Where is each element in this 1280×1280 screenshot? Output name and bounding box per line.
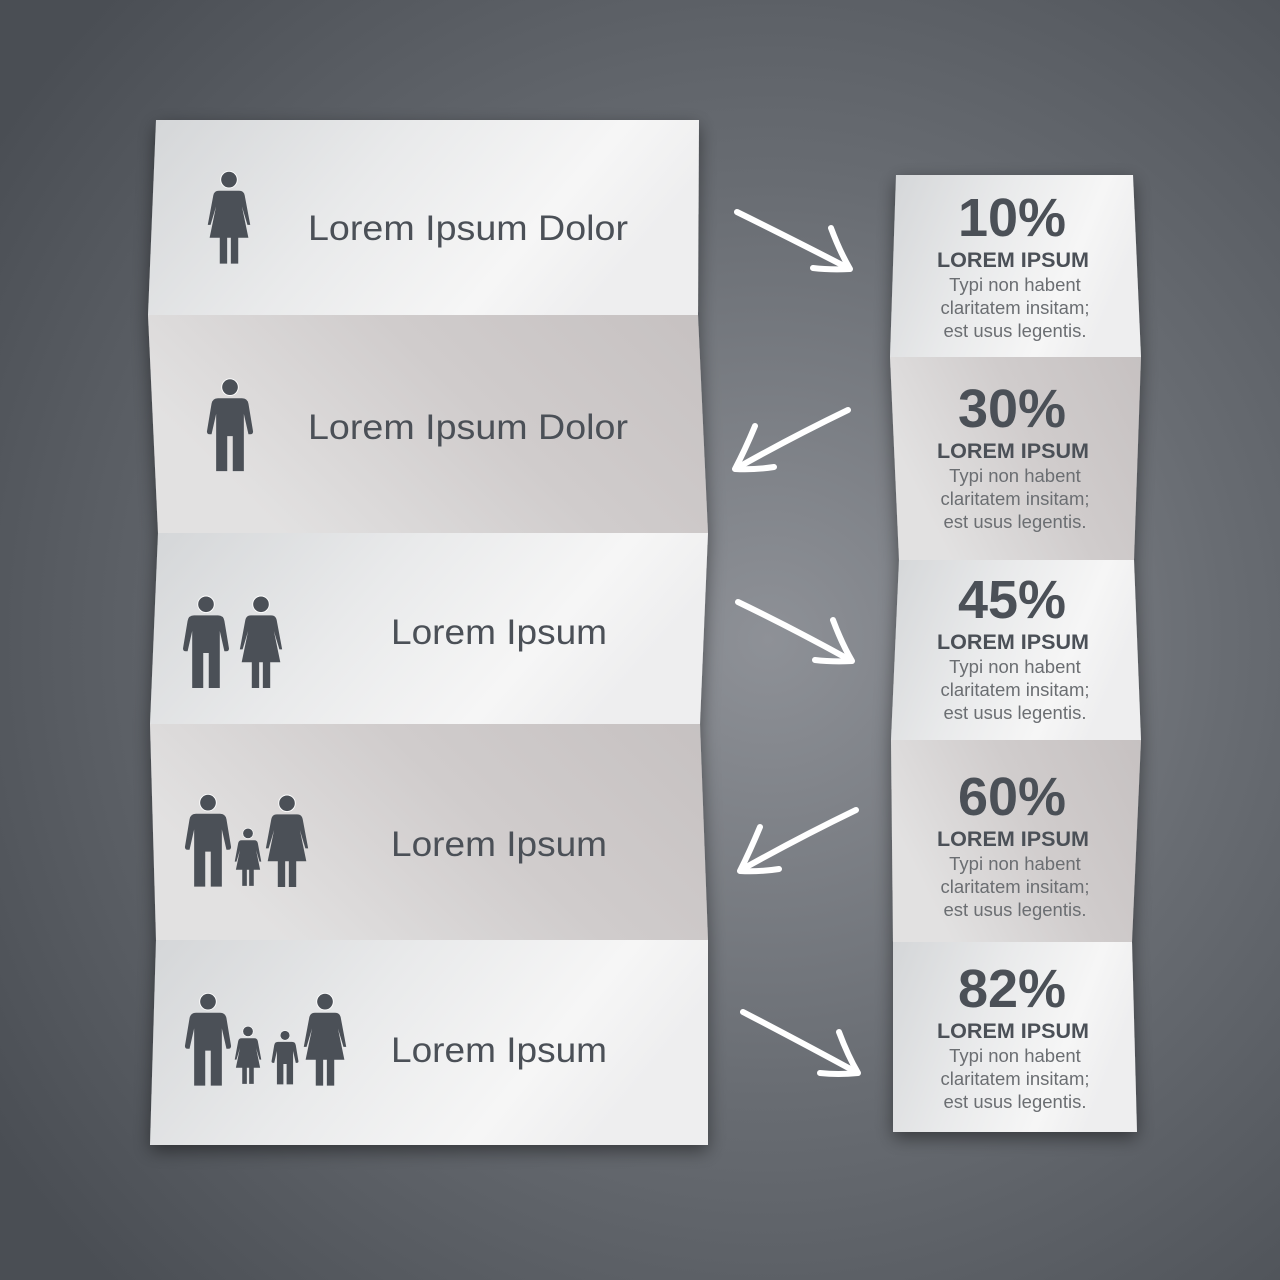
stat: 60%: LOREM IPSUM xyxy=(937,828,1089,851)
stat: 82%: claritatem insitam; xyxy=(940,1068,1090,1089)
row 1: woman icon and label xyxy=(208,171,628,264)
stat: 10%: Typi non habent xyxy=(949,274,1081,295)
arrow 1 xyxy=(737,212,850,269)
stat: 82%: LOREM IPSUM xyxy=(937,1020,1089,1043)
stat: 10%: LOREM IPSUM xyxy=(937,249,1089,272)
stat: 30% xyxy=(937,379,1090,532)
stat: 60%: est usus legentis. xyxy=(944,899,1086,920)
stat: 82%: Typi non habent xyxy=(949,1045,1081,1066)
stat: 10% xyxy=(937,188,1090,341)
stat: 60%: Typi non habent xyxy=(949,853,1081,874)
stat: 30%: 30% xyxy=(958,379,1066,439)
stat: 45%: claritatem insitam; xyxy=(940,679,1090,700)
stat: 45%: est usus legentis. xyxy=(944,702,1086,723)
arrow 4 xyxy=(740,810,856,871)
arrow 2 xyxy=(735,410,848,469)
stat: 30%: claritatem insitam; xyxy=(940,488,1090,509)
stat: 10%: 10% xyxy=(958,188,1066,248)
stat: 30%: Typi non habent xyxy=(949,465,1081,486)
row 3: couple icon and label: Lorem Ipsum xyxy=(391,613,607,652)
stat: 60%: 60% xyxy=(958,767,1066,827)
stat: 45%: 45% xyxy=(958,570,1066,630)
row 2: man icon and label: Lorem Ipsum Dolor xyxy=(308,408,628,447)
stat: 82%: est usus legentis. xyxy=(944,1091,1086,1112)
stat: 45%: LOREM IPSUM xyxy=(937,631,1089,654)
stat: 30%: est usus legentis. xyxy=(944,511,1086,532)
row 1: woman icon and label: Lorem Ipsum Dolor xyxy=(308,209,628,248)
stat: 60% xyxy=(937,767,1090,920)
stat: 30%: LOREM IPSUM xyxy=(937,440,1089,463)
panel: right folded strip xyxy=(890,175,1141,1132)
panel: left folded sheet xyxy=(148,120,708,1145)
stat: 45% xyxy=(937,570,1090,723)
stat: 82% xyxy=(937,959,1090,1112)
stat: 60%: claritatem insitam; xyxy=(940,876,1090,897)
row 4: family with one child and label xyxy=(185,794,607,887)
arrow 5 xyxy=(743,1012,858,1074)
stat: 82%: 82% xyxy=(958,959,1066,1019)
row 2: man icon and label xyxy=(207,379,628,471)
row 5: family with two children and label: Lorem Ipsum xyxy=(391,1031,607,1070)
stat: 10%: est usus legentis. xyxy=(944,320,1086,341)
row 3: couple icon and label xyxy=(183,596,607,688)
arrow 3 xyxy=(738,602,852,661)
row 5: family with two children and label xyxy=(185,993,607,1086)
row 4: family with one child and label: Lorem Ipsum xyxy=(391,825,607,864)
stat: 10%: claritatem insitam; xyxy=(940,297,1090,318)
stat: 45%: Typi non habent xyxy=(949,656,1081,677)
